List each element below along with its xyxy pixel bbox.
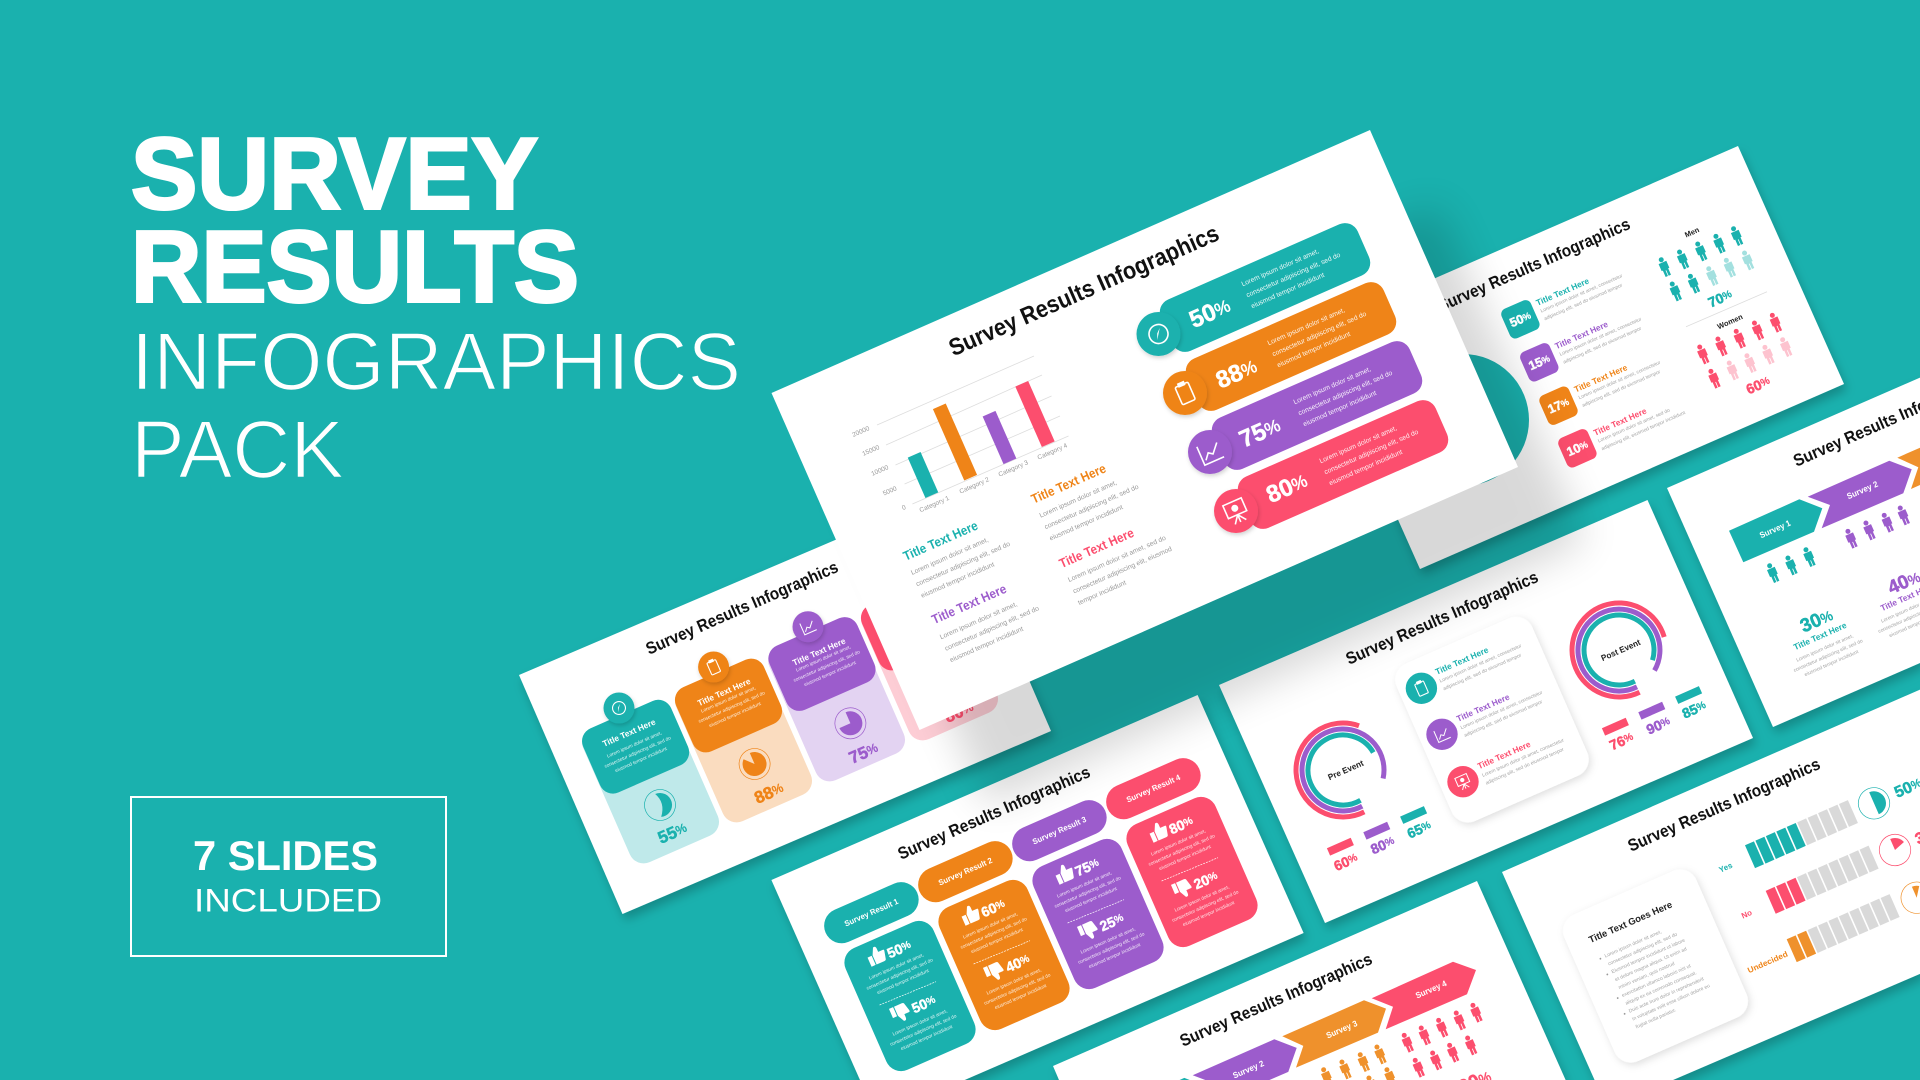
panel: slide with yes, no, undecided bars: [1502, 690, 1920, 1080]
result column 3: [1007, 795, 1169, 994]
card: 55%: Lorem ipsum dolor sit amet,: [606, 730, 663, 760]
item titles and text: Lorem ipsum dolor sit amet, sed do: [1597, 407, 1671, 444]
ring chart: post event: Post Event: [1599, 637, 1642, 663]
result column 1: Survey Result 1: [843, 897, 900, 928]
text block: red: Title Text Here: [1057, 525, 1136, 571]
people: survey 1: [1765, 546, 1817, 584]
item titles and text: Title Text Here: [1534, 276, 1591, 308]
result column 2: eiusmod tempor incididunt: [994, 983, 1048, 1011]
result column 2: consectetur adipiscing elit, sed do: [960, 916, 1028, 951]
pill: 75%: [1188, 337, 1427, 474]
text card with bullets: exercitation ullamco laboris nisi ut: [1621, 963, 1693, 999]
result column 4: eiusmod tempor incididunt: [1182, 900, 1236, 928]
legend: pre event bars: [1327, 806, 1433, 874]
ring chart: post event: [1572, 603, 1664, 697]
card: 55%: [577, 692, 724, 868]
center card with three items: Lorem ipsum dolor sit amet, consectetur: [1439, 643, 1523, 684]
text block: teal: consectetur adipiscing elit, sed do: [915, 541, 1012, 588]
card: 88%: consectetur adipiscing elit, sed do: [698, 690, 766, 725]
card: 88%: [670, 652, 817, 827]
legend: pre event bars: 60%: [1331, 849, 1360, 874]
stat: 40%: [1874, 566, 1920, 642]
men people chart: 70%: [1706, 286, 1734, 311]
center card with three items: adipiscing elit, sed do eiusmod tempor: [1442, 652, 1523, 692]
card: 55%: eiusmod tempor incididunt: [614, 746, 669, 774]
text card with bullets: Lorem ipsum dolor sit amet,: [1604, 929, 1663, 959]
percent boxes: 17%: [1546, 395, 1571, 417]
bar chart: 20000: [851, 425, 871, 439]
women people chart: [1695, 311, 1794, 397]
result column 4: 20%: [1191, 868, 1220, 892]
bar chart: 0: [901, 504, 907, 512]
text block: red: consectetur adipiscing elit, eiusmod: [1072, 546, 1173, 595]
text card with bullets: [1557, 864, 1754, 1068]
percent boxes: [1499, 298, 1598, 469]
legend: pre event bars: 65%: [1405, 817, 1433, 842]
result column 4: eiusmod tempor incididunt: [1158, 844, 1213, 872]
text card with bullets: in voluptate velit esse cillum dolore eu: [1631, 983, 1711, 1022]
card: 80%: [856, 572, 1003, 745]
center card with three items: Lorem ipsum dolor sit amet, consectetur: [1460, 690, 1544, 731]
bar chart: Category 3: [997, 459, 1030, 479]
stat: 30%: [1789, 605, 1867, 681]
card: 55%: Title Text Here: [601, 717, 657, 749]
arrow: survey 2: [1808, 461, 1912, 528]
bar chart: Category 1: [919, 495, 951, 514]
pill: 75%: consectetur adipiscing elit, sed do: [1297, 370, 1394, 417]
center card with three items: adipiscing elit, sed do eiusmod tempor: [1485, 747, 1565, 787]
result column 3: Lorem ipsum dolor sit amet,: [1056, 870, 1113, 900]
arrow: survey 2: [1193, 1039, 1297, 1080]
panel: slide with four percent cards: [519, 492, 1051, 914]
panel: slide with yes, no, undecided bars: Survey Results Infographics: [1625, 754, 1823, 856]
men people chart: Men: [1683, 225, 1701, 239]
result column 1: consectetur adipiscing elit, sed do: [866, 957, 934, 992]
pill: 75%: eiusmod tempor incididunt: [1302, 390, 1378, 428]
text block: teal: eiusmod tempor incididunt: [920, 561, 996, 600]
item titles and text: Title Text Here: [1553, 319, 1610, 351]
panel: slide with survey arrows, bottom edge: [1053, 881, 1566, 1080]
arrow: survey 4: Survey 4: [1414, 978, 1448, 1001]
text block: orange: Title Text Here: [1029, 461, 1108, 507]
pill: 80%: eiusmod tempor incididunt: [1328, 449, 1404, 487]
result column 4: consectetur adipiscing elit, sed do: [1171, 889, 1240, 924]
bar row: yes: Yes: [1718, 861, 1734, 875]
pill: 50%: [1136, 219, 1375, 356]
stat: 30%: 30%: [1797, 605, 1836, 637]
bar row: yes: [1718, 775, 1920, 875]
text card with bullets: fugiat nulla pariatur.: [1635, 1007, 1677, 1030]
panel: slide with men and women people charts: [1314, 146, 1844, 569]
arrow: survey 2: Survey 2: [1845, 479, 1880, 501]
people: survey 4: [1399, 1001, 1484, 1078]
arrow: survey 3: [1282, 1000, 1386, 1068]
legend: pre event bars: 80%: [1368, 833, 1397, 857]
panel: slide with thumbs up and down results: Survey Results Infographics: [895, 762, 1093, 864]
center card with three items: Title Text Here: [1455, 692, 1511, 724]
text block: orange: consectetur adipiscing elit, sed do: [1044, 484, 1140, 531]
result column 2: 60%: [979, 896, 1007, 920]
legend: post event bars: 85%: [1680, 697, 1708, 722]
badge: 7 slides included: INCLUDED: [194, 882, 382, 918]
title: survey results infographics pack: INFOGRAPHICS: [131, 316, 741, 408]
text card with bullets: et dolore magna aliqua. Ut enim ad: [1614, 946, 1688, 983]
item titles and text: Lorem ipsum dolor sit amet, consectetur: [1559, 316, 1643, 358]
pill: 80%: [1214, 396, 1453, 533]
result column 4: consectetur adipiscing elit, sed do: [1148, 833, 1216, 868]
result column 2: Survey Result 2: [937, 856, 994, 887]
title: survey results infographics pack: PACK: [131, 404, 344, 496]
percent boxes: 15%: [1526, 351, 1552, 373]
center card with three items: [1390, 611, 1594, 828]
bar row: undecided: [1746, 877, 1920, 975]
item titles and text: adipiscing elit, sed do eiusmod tempor: [1562, 326, 1643, 366]
title: survey results infographics pack: [131, 118, 741, 496]
center card with three items: adipiscing elit, sed do eiusmod tempor: [1463, 699, 1544, 739]
result column 3: 75%: [1073, 855, 1101, 879]
card: 75%: eiusmod tempor incididunt: [803, 660, 858, 688]
pill: 88%: Lorem ipsum dolor sit amet,: [1267, 307, 1346, 347]
stat: 30%: Lorem ipsum dolor sit amet,: [1796, 633, 1854, 664]
badge: 7 slides included: [131, 797, 446, 956]
badge: 7 slides included: 7 SLIDES: [193, 832, 378, 879]
text block: orange: eiusmod tempor incididunt: [1049, 504, 1124, 542]
pill: 88%: consectetur adipiscing elit, sed do: [1271, 311, 1368, 358]
pill: 80%: consectetur adipiscing elit, sed do: [1323, 429, 1420, 476]
result column 3: consectetur adipiscing elit, sed do: [1077, 931, 1146, 966]
panel: slide with survey arrows, right edge: [1667, 369, 1920, 727]
pill: 80%: Lorem ipsum dolor sit amet,: [1319, 425, 1398, 465]
pill: 75%: 75%: [1235, 412, 1285, 453]
main slide drop shadow: [840, 205, 1586, 805]
panel: slide with four percent cards: Survey Results Infographics: [643, 557, 841, 659]
item titles and text: adipiscing elit, eiusmod tempor incididunt: [1601, 410, 1687, 452]
card: 88%: Lorem ipsum dolor sit amet,: [700, 685, 757, 715]
item titles and text: Title Text Here: [1592, 406, 1648, 438]
text card with bullets: Eiusmod tempor incididunt ut labore: [1611, 938, 1686, 975]
title: survey results infographics pack: SURVEY: [131, 118, 538, 230]
pill: 88%: eiusmod tempor incididunt: [1276, 331, 1352, 369]
ring chart: pre event: [1296, 723, 1384, 817]
result column 2: Lorem ipsum dolor sit amet,: [962, 911, 1019, 941]
text block: purple: Lorem ipsum dolor sit amet,: [939, 601, 1019, 641]
item titles and text: Title Text Here: [1573, 362, 1629, 394]
item titles and text: adipiscing elit, sed do eiusmod tempor: [1543, 282, 1624, 322]
result column 1: consectetur adipiscing elit, sed do: [889, 1013, 958, 1048]
result column 4: 80%: [1167, 813, 1195, 837]
text block: red: [1057, 525, 1178, 607]
pill: 88%: 88%: [1212, 353, 1261, 394]
legend: post event bars: 90%: [1644, 713, 1673, 738]
pie chart behind main slide: [1397, 354, 1529, 486]
stat: 30%: eiusmod tempor incididunt: [1804, 649, 1860, 678]
pill: 80%: 80%: [1262, 467, 1312, 509]
item titles and text: adipiscing elit, sed do eiusmod tempor: [1581, 369, 1662, 409]
arrow: survey 2: Survey 2: [1231, 1058, 1266, 1080]
card: 88%: Title Text Here: [696, 676, 752, 708]
bar row: no: No: [1740, 908, 1753, 921]
center card with three items: Lorem ipsum dolor sit amet, consectetur: [1481, 737, 1565, 779]
text card with bullets: minim veniam, quis nostrud: [1618, 961, 1676, 991]
text card with bullets: Duis aute irure dolor in reprehenderit: [1628, 976, 1706, 1015]
arrow: survey 1: [1729, 499, 1822, 562]
percent boxes: 50%: [1508, 308, 1533, 330]
pill: 75%: Lorem ipsum dolor sit amet,: [1293, 366, 1372, 406]
panel: slide with pre and post event rings: [1219, 500, 1753, 923]
panel: slide with pre and post event rings: Survey Results Infographics: [1343, 567, 1541, 669]
panel: slide with men and women people charts: Survey Results Infographics: [1435, 214, 1633, 316]
arrow: survey 3: [1897, 448, 1920, 489]
bar chart: [851, 356, 1069, 514]
bar chart: 10000: [870, 464, 890, 478]
result column 4: Lorem ipsum dolor sit amet,: [1150, 828, 1207, 858]
result column 1: 50%: [909, 992, 938, 1016]
result column 2: consectetur adipiscing elit, sed do: [983, 972, 1052, 1007]
stat: 30%: Title Text Here: [1792, 620, 1848, 652]
text block: teal: Lorem ipsum dolor sit amet,: [910, 537, 990, 577]
result column 4: Survey Result 4: [1125, 773, 1182, 804]
result column 2: [913, 836, 1075, 1035]
ring chart: pre event: Pre Event: [1326, 758, 1365, 782]
bar chart: Category 4: [1037, 442, 1069, 462]
text block: red: Lorem ipsum dolor sit amet, sed do: [1067, 535, 1167, 584]
women people chart: 60%: [1744, 373, 1772, 397]
card: 88%: 88%: [752, 778, 787, 808]
text block: red: tempor incididunt: [1077, 580, 1127, 607]
panel: main slide with bar chart and percent pills: Survey Results Infographics: [945, 220, 1223, 362]
card: 55%: consectetur adipiscing elit, sed do: [604, 735, 672, 770]
result column 1: Lorem ipsum dolor sit amet,: [868, 952, 925, 982]
result column 3: eiusmod tempor incididunt: [1064, 886, 1119, 914]
bar chart: 5000: [882, 485, 898, 498]
card: 75%: [763, 611, 910, 786]
result column 1: 50%: [885, 937, 913, 961]
pill: 50%: Lorem ipsum dolor sit amet,: [1241, 248, 1320, 288]
pill: 50%: consectetur adipiscing elit, sed do: [1245, 252, 1342, 299]
people: survey 3: [1319, 1043, 1398, 1080]
text block: purple: eiusmod tempor incididunt: [949, 626, 1025, 664]
text block: orange: [1029, 461, 1145, 542]
result column 4: [1101, 753, 1263, 952]
result column 2: Lorem ipsum dolor sit amet,: [986, 967, 1042, 997]
center card with three items: Title Text Here: [1476, 739, 1532, 771]
men people chart: [1656, 225, 1755, 311]
result column 3: eiusmod tempor incididunt: [1088, 942, 1142, 970]
text block: purple: Title Text Here: [929, 581, 1009, 627]
result column 1: eiusmod tempor incididunt: [876, 968, 931, 996]
panel: slide with survey arrows, bottom edge: Survey Results Infographics: [1177, 949, 1375, 1051]
result column 3: consectetur adipiscing elit, sed do: [1054, 875, 1122, 910]
text block: purple: consectetur adipiscing elit, sed do: [944, 605, 1040, 653]
result column 3: Lorem ipsum dolor sit amet,: [1080, 926, 1136, 956]
pill: 50%: 50%: [1185, 292, 1235, 334]
card: 55%: 55%: [655, 818, 690, 848]
arrow: survey 1: Survey 1: [1758, 518, 1792, 540]
text block: purple: [929, 581, 1045, 664]
result column 1: [819, 877, 981, 1076]
result column 1: eiusmod tempor incididunt: [900, 1024, 954, 1052]
arrow: survey 1: [1180, 1078, 1190, 1080]
percent boxes: 10%: [1565, 437, 1590, 459]
item titles and text: [1534, 273, 1687, 452]
item titles and text: Lorem ipsum dolor sit amet, consectetur: [1540, 273, 1624, 314]
text block: teal: [901, 518, 1017, 600]
item titles and text: Lorem ipsum dolor sit amet, consectetur: [1578, 360, 1662, 401]
card: 75%: Lorem ipsum dolor sit amet,: [795, 644, 852, 674]
bar row: undecided: Undecided: [1746, 949, 1789, 975]
pill: 50%: eiusmod tempor incididunt: [1250, 272, 1326, 310]
text block: orange: Lorem ipsum dolor sit amet,: [1039, 479, 1118, 520]
result column 1: Lorem ipsum dolor sit amet,: [892, 1008, 948, 1038]
panel: main slide with bar chart and percent pills: [772, 130, 1518, 730]
text card with bullets: aliquip ex ea commodo consequat.: [1625, 970, 1698, 1007]
arrow: survey 4: [1372, 962, 1476, 1029]
center card with three items: Title Text Here: [1434, 645, 1490, 677]
result column 3: 25%: [1097, 910, 1126, 934]
title: survey results infographics pack: RESULTS: [131, 212, 579, 324]
legend: post event bars: [1602, 686, 1708, 753]
card: 80%: 80%: [942, 697, 977, 727]
result column 2: eiusmod tempor incididunt: [970, 927, 1025, 955]
stat: 30%: consectetur adipiscing elit, sed do: [1793, 638, 1864, 674]
bar chart: Category 2: [958, 476, 991, 496]
result column 2: 40%: [1003, 951, 1032, 975]
text block: teal: Title Text Here: [901, 518, 980, 564]
women people chart: Women: [1716, 312, 1745, 331]
legend: post event bars: 76%: [1607, 729, 1636, 753]
card: 75%: consectetur adipiscing elit, sed do: [793, 649, 861, 684]
bar row: no: [1740, 822, 1920, 921]
result column 4: Lorem ipsum dolor sit amet,: [1174, 884, 1230, 914]
card: 88%: eiusmod tempor incididunt: [708, 701, 763, 729]
people: survey 2: [1843, 504, 1911, 549]
pill: 88%: [1163, 278, 1401, 415]
result column 3: Survey Result 3: [1031, 815, 1088, 846]
arrow: survey 3: Survey 3: [1325, 1018, 1359, 1041]
card: 75%: 75%: [846, 738, 881, 768]
text card with bullets: Title Text Goes Here: [1587, 900, 1674, 946]
text card with bullets: consectetur adipiscing elit, sed do: [1607, 932, 1679, 967]
panel: slide with thumbs up and down results: [771, 695, 1304, 1080]
bar chart: 15000: [861, 444, 881, 458]
card: 75%: Title Text Here: [791, 636, 847, 668]
